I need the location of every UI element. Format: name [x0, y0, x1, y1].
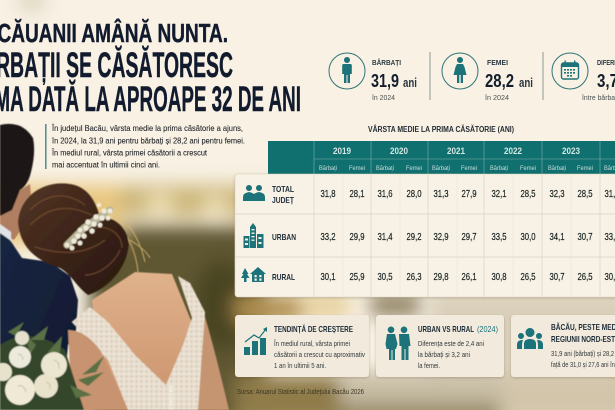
row: total județ: JUDEȚ	[272, 195, 295, 205]
man collar	[0, 224, 11, 244]
card: urban vs rural: la femei.	[418, 361, 440, 370]
row: total județ: 31,8	[320, 188, 336, 200]
woman hair	[18, 183, 129, 295]
row: urban: 31,4	[378, 231, 393, 243]
stat: femei: FEMEI	[487, 58, 508, 67]
intro text: mai accentuat în ultimii cinci ani.	[52, 160, 160, 170]
divider	[542, 52, 544, 100]
card: bacău peste media	[511, 315, 615, 377]
row: urban: 29,7	[462, 231, 477, 243]
table header: Femei	[349, 165, 365, 172]
icon: calendar	[562, 60, 578, 79]
table header: 2021	[447, 146, 466, 157]
row: urban: 33,5	[492, 231, 507, 243]
intro text	[45, 124, 245, 170]
table header: Femei	[461, 165, 477, 172]
row: total județ: TOTAL	[272, 184, 294, 194]
icon: growth chart	[244, 327, 267, 355]
row: rural: 26,5	[578, 271, 593, 283]
row: urban: 30,7	[578, 231, 593, 243]
row: urban: 29,9	[350, 231, 365, 243]
row: urban: 32,9	[434, 231, 449, 243]
woman back	[92, 272, 195, 410]
photo: couple	[0, 124, 229, 410]
stat: femei	[442, 53, 533, 102]
man head hair	[0, 124, 34, 218]
stat: femei: în 2024	[484, 93, 509, 102]
row: rural	[241, 267, 615, 283]
table header: Bărbați	[376, 165, 394, 172]
man suit	[0, 233, 78, 410]
dress lace	[72, 276, 205, 410]
intro text: În mediul rural, vârsta primei căsătorii a crescut	[51, 148, 208, 158]
icon: woman	[454, 57, 466, 83]
table header	[268, 141, 615, 175]
table header: Bărbați	[490, 165, 508, 172]
card: tendință de creștere: 1 an în ultimii 5 ani.	[274, 361, 326, 370]
source: Sursa: Anuarul Statistic al Județului Bacău 2026	[237, 389, 364, 396]
row: total județ: 31,6	[378, 188, 393, 200]
stat: bărbați	[329, 53, 417, 102]
stat: femei: 28,2	[485, 71, 514, 91]
table header: Bărbați	[548, 165, 566, 172]
icon: people	[243, 185, 265, 201]
icon: couple	[386, 326, 410, 360]
intro text: în 2024, la 31,9 ani pentru bărbați și 28,2 ani pentru femei.	[51, 136, 245, 146]
dress buttons	[170, 386, 172, 410]
icon: group	[517, 328, 543, 349]
row: rural: 26,1	[462, 271, 477, 283]
table title: VÂRSTA MEDIE LA PRIMA CĂSĂTORIE (ANI)	[368, 125, 514, 134]
row: total județ	[243, 184, 615, 205]
card: urban vs rural: URBAN VS RURAL	[418, 324, 474, 334]
row: rural: 30,8	[492, 271, 507, 283]
table body panel	[235, 174, 615, 297]
row: rural: 29,8	[434, 271, 449, 283]
card: tendință de creștere: În mediul rural, vârsta primei	[273, 339, 350, 348]
row: total județ: 28,0	[406, 188, 422, 200]
table header: 2022	[504, 146, 522, 157]
title	[0, 18, 301, 119]
stat: bărbați: în 2024	[371, 93, 395, 102]
row: total județ: 28,1	[350, 188, 365, 200]
table header: 2019	[333, 146, 351, 157]
row: rural: 26,5	[520, 271, 536, 283]
divider	[430, 52, 431, 100]
icon: man	[342, 57, 352, 83]
row: rural: RURAL	[272, 272, 295, 282]
table header: Bărbați	[319, 165, 337, 172]
row: urban: 29,2	[406, 231, 422, 243]
table header: 2020	[390, 146, 408, 157]
card: urban vs rural: (2024)	[477, 324, 498, 334]
icon: tree and house	[241, 267, 266, 282]
stat: femei: ani	[519, 75, 533, 90]
card: tendință de creștere: TENDINȚĂ DE CREȘTERE	[274, 324, 353, 334]
woman left arm	[68, 330, 128, 410]
row: total județ: 27,9	[462, 188, 477, 200]
intro text: În județul Bacău, vârsta medie la prima căsătorie a ajuns,	[51, 124, 243, 133]
card: urban vs rural: la bărbați și 3,2 ani	[418, 350, 470, 359]
row: total județ: 28,5	[520, 188, 536, 200]
row: urban: 30,0	[520, 231, 536, 243]
row: total județ: 32,1	[492, 188, 507, 200]
table header: Bărbați	[432, 165, 450, 172]
card: urban vs rural: Diferența este de 2,4 ani	[418, 339, 484, 348]
hair flowers	[65, 203, 113, 250]
table header: Femei	[520, 165, 536, 172]
icon: buildings	[244, 223, 264, 248]
row: rural: 26,3	[406, 271, 422, 283]
stat: bărbați: 31,9	[371, 71, 399, 91]
table header: Femei	[406, 165, 422, 172]
row: urban	[244, 223, 615, 248]
row: urban: 33,2	[320, 231, 336, 243]
card: urban vs rural	[376, 315, 504, 377]
row: rural: 30,5	[378, 271, 393, 283]
table header: Femei	[577, 165, 593, 172]
woman right arm	[195, 310, 229, 410]
stat: diferență	[552, 53, 615, 102]
row: total județ: 31,3	[434, 188, 449, 200]
card: tendință de creștere: căsătorii a crescut cu aproximativ	[274, 350, 365, 359]
bouquet	[0, 322, 104, 410]
row: rural: 25,9	[350, 271, 365, 283]
row: rural: 30,1	[320, 271, 336, 283]
row: total județ: 28,5	[578, 188, 593, 200]
row: rural: 30,7	[550, 271, 565, 283]
stat: bărbați: BĂRBAȚI	[372, 58, 401, 67]
row: total județ: 32,3	[550, 188, 565, 200]
row: urban: 34,1	[550, 231, 565, 243]
stat: bărbați: ani	[403, 75, 417, 90]
table header: 2023	[562, 146, 580, 157]
golden hair wisps	[124, 225, 150, 272]
row: urban: URBAN	[272, 232, 296, 242]
man neck	[0, 184, 31, 240]
card: tendință de creștere	[235, 315, 369, 377]
